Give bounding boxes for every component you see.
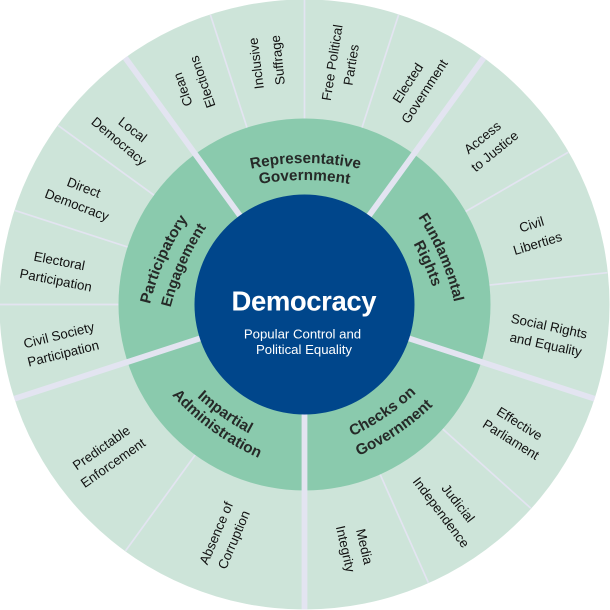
heading: Representative Government: Representative xyxy=(250,154,360,168)
label: Local Democracy: Democracy xyxy=(88,114,150,169)
label: Predictable Enforcement: Predictable xyxy=(70,423,133,473)
label: Absence of Corruption xyxy=(196,499,253,571)
center subtitle: Political Equality xyxy=(256,342,352,357)
center subtitle: Popular Control and xyxy=(244,326,361,341)
label: Civil Society Participation xyxy=(22,319,100,370)
panel: Participatory Engagement xyxy=(18,114,206,370)
label: Predictable Enforcement: Enforcement xyxy=(78,435,148,491)
heading: Checks on Government: Checks on xyxy=(350,388,416,434)
label: Effective Parliament: Effective xyxy=(494,404,545,443)
label: Inclusive Suffrage xyxy=(246,34,288,90)
middle ring xyxy=(118,118,490,490)
panel: Checks on Government xyxy=(333,388,545,574)
label: Inclusive Suffrage: Suffrage xyxy=(268,34,288,86)
label: Civil Society Participation: Civil Society xyxy=(22,319,96,351)
label: Direct Democracy: Democracy xyxy=(43,186,111,224)
label: Social Rights and Equality: Social Rights xyxy=(510,311,589,342)
label: Electoral Participation: Participation xyxy=(18,266,93,295)
label: Elected Government: Elected xyxy=(390,60,426,106)
label: Free Political Parties: Free Political xyxy=(319,23,346,102)
heading: Representative Government xyxy=(250,154,360,184)
label: Judicial Independence: Judicial xyxy=(439,481,478,525)
label: Social Rights and Equality: and Equality xyxy=(508,330,583,360)
label: Elected Government: Government xyxy=(398,56,451,126)
label: Direct Democracy: Direct xyxy=(65,174,103,201)
label: Social Rights and Equality xyxy=(508,311,589,360)
label: Absence of Corruption: Absence of xyxy=(196,499,236,567)
label: Free Political Parties: Parties xyxy=(341,43,362,87)
label: Clean Elections: Elections xyxy=(187,54,218,110)
label: Electoral Participation: Electoral xyxy=(33,249,86,273)
heading: Checks on Government: Government xyxy=(356,400,433,454)
label: Inclusive Suffrage: Inclusive xyxy=(246,37,267,90)
label: Clean Elections xyxy=(170,54,218,110)
heading: Participatory Engagement: Participatory xyxy=(140,214,188,304)
label: Absence of Corruption: Corruption xyxy=(215,508,253,571)
label: Access to Justice: to Justice xyxy=(468,128,521,175)
center title: Democracy xyxy=(232,286,377,317)
label: Judicial Independence: Independence xyxy=(410,474,472,551)
label: Free Political Parties xyxy=(319,23,362,102)
label: Local Democracy: Local xyxy=(115,114,150,145)
heading: Representative Government: Government xyxy=(259,172,350,184)
heading: Impartial Administration: Impartial xyxy=(198,390,254,434)
heading: Fundamental Rights: Rights xyxy=(414,240,440,286)
label: Media Integrity xyxy=(333,524,376,574)
heading: Impartial Administration: Administration xyxy=(172,390,260,458)
label: Effective Parliament: Parliament xyxy=(480,416,542,463)
label: Clean Elections: Clean xyxy=(170,71,196,108)
label: Civil Liberties: Liberties xyxy=(511,229,564,258)
label: Access to Justice: Access xyxy=(461,118,504,157)
panel: Fundamental Rights xyxy=(414,118,589,360)
label: Civil Liberties xyxy=(511,214,564,258)
label: Civil Liberties: Civil xyxy=(517,214,546,235)
label: Electoral Participation xyxy=(18,249,93,295)
panel: Impartial Administration xyxy=(70,390,260,571)
heading: Fundamental Rights: Fundamental xyxy=(418,212,464,302)
heading: Participatory Engagement: Engagement xyxy=(161,223,206,307)
label: Media Integrity: Media xyxy=(353,527,376,567)
label: Civil Society Participation: Participation xyxy=(26,337,100,370)
panel: Representative Government xyxy=(170,23,451,184)
center circle: Democracy xyxy=(194,194,414,414)
label: Media Integrity: Integrity xyxy=(333,524,358,574)
